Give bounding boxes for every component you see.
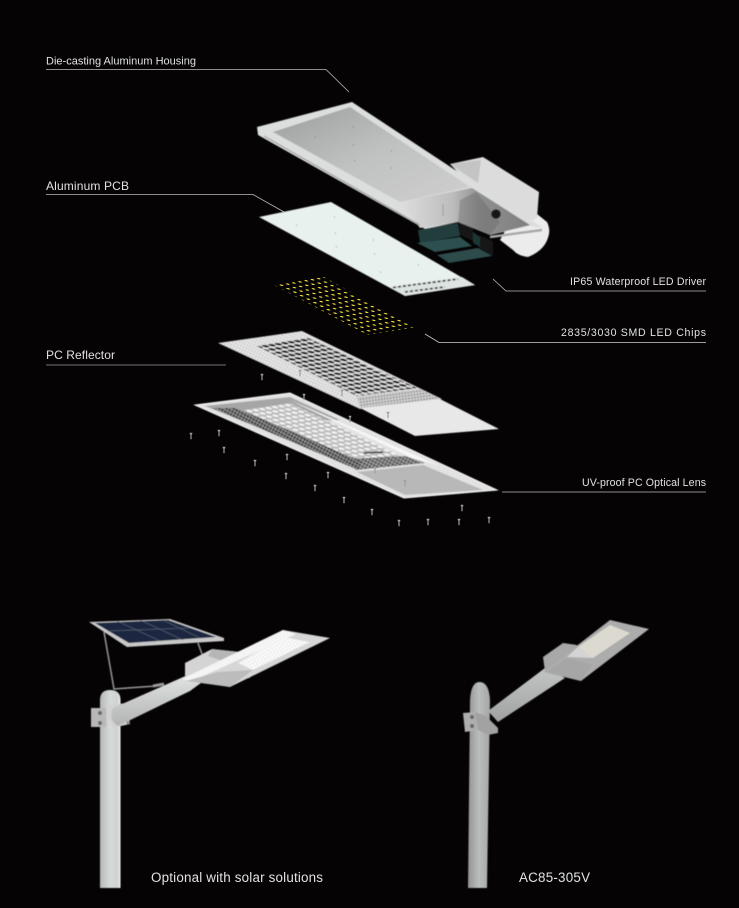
exploded part: PC reflector bbox=[218, 331, 499, 436]
lamp head bbox=[543, 620, 649, 681]
reflector plate bbox=[218, 331, 442, 409]
exploded part: aluminum housing with driver bbox=[257, 102, 549, 263]
reflector holes bbox=[257, 338, 417, 396]
clamp bbox=[463, 712, 477, 732]
small fixing points bbox=[315, 127, 392, 168]
clamp bbox=[91, 708, 106, 727]
lamp lower face bbox=[186, 670, 253, 687]
pole bbox=[100, 690, 120, 888]
screws bbox=[190, 370, 490, 526]
label: 2835/3030 SMD LED Chips: 2835/3030 SMD LED Chips bbox=[561, 327, 706, 339]
lens white optics bbox=[243, 403, 400, 460]
lens lower panel bbox=[357, 465, 483, 495]
lamp without solar panel bbox=[463, 620, 649, 888]
lamp head bbox=[182, 630, 330, 687]
housing outer frame bbox=[257, 102, 543, 235]
lens dotted strip bbox=[345, 456, 425, 470]
lens white band bbox=[290, 400, 440, 466]
housing rod bbox=[490, 230, 542, 237]
exploded part: aluminum PCB bbox=[259, 202, 475, 296]
pole bbox=[468, 682, 490, 888]
housing inner rail bbox=[264, 136, 420, 225]
lamp with solar panel bbox=[89, 619, 330, 888]
PCB contact strip bbox=[391, 277, 475, 296]
caption: solar option: Optional with solar solutions bbox=[151, 870, 323, 885]
label: Die-casting Aluminum Housing: Die-casting Aluminum Housing bbox=[46, 56, 196, 68]
label: PC Reflector: PC Reflector bbox=[46, 348, 115, 362]
PCB board bbox=[259, 202, 475, 296]
solar panel bracket rods bbox=[104, 632, 202, 689]
label: IP65 Waterproof LED Driver bbox=[493, 276, 706, 291]
reflector dotted strip bbox=[357, 389, 440, 408]
PCB fixing points bbox=[296, 217, 419, 272]
housing rear box bbox=[450, 157, 539, 224]
arm bbox=[488, 668, 565, 722]
label: Aluminum PCB bbox=[46, 179, 284, 212]
lit LED area bbox=[238, 637, 310, 670]
lens frame bbox=[195, 393, 497, 498]
label: Die-casting Aluminum Housing bbox=[46, 56, 349, 92]
LED driver blocks bbox=[418, 223, 460, 243]
exploded part: PC optical lens bbox=[195, 393, 497, 498]
lit LED area bbox=[578, 625, 630, 658]
reflector lower panel bbox=[360, 399, 499, 436]
housing driver cavity bbox=[400, 188, 530, 235]
caption: AC voltage: AC85-305V bbox=[519, 870, 590, 885]
exploded part: SMD LED chips bbox=[274, 275, 415, 335]
rear box bbox=[543, 643, 577, 672]
housing inner face bbox=[273, 107, 470, 202]
label: 2835/3030 SMD LED Chips bbox=[425, 327, 706, 342]
label: Aluminum PCB: Aluminum PCB bbox=[46, 179, 129, 193]
label: UV-proof PC Optical Lens: UV-proof PC Optical Lens bbox=[582, 477, 706, 489]
rear box bbox=[185, 649, 250, 678]
lens dark dotted band bbox=[212, 408, 362, 470]
solar panel bbox=[89, 619, 224, 647]
housing mounting cylinder bbox=[500, 214, 549, 257]
label: IP65 Waterproof LED Driver: IP65 Waterproof LED Driver bbox=[570, 276, 706, 288]
arm bbox=[111, 674, 205, 726]
